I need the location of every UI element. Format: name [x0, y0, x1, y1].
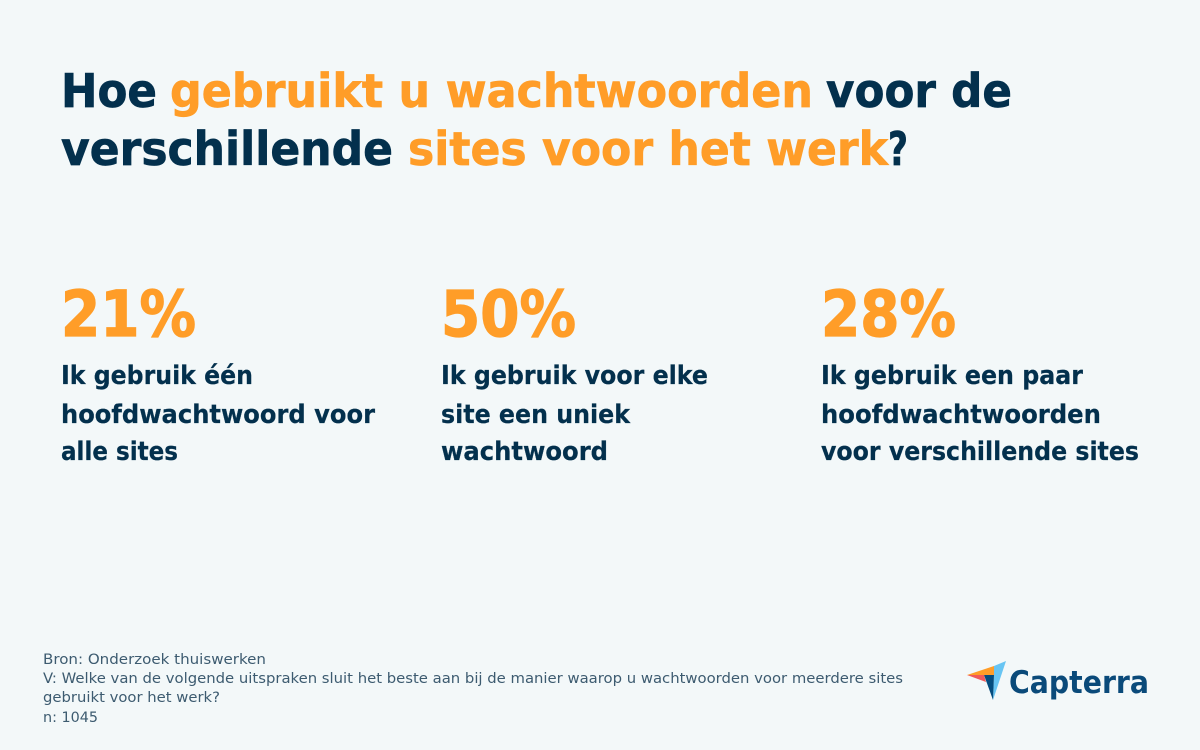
title: [61, 64, 1012, 176]
source note: [43, 652, 903, 726]
source note: Bron: Onderzoek thuiswerken: [43, 652, 266, 668]
stat: 28%: [821, 278, 1139, 467]
title: sites voor het werk: [408, 122, 889, 176]
stat: 28%: voor verschillende sites: [821, 437, 1139, 467]
stat: 50%: 50%: [441, 278, 576, 351]
stat: 21%: 21%: [61, 278, 196, 351]
logo: Capterra: [967, 661, 1149, 701]
title: Hoe: [61, 64, 157, 118]
stat: 50%: [441, 278, 708, 467]
title: voor de: [826, 64, 1012, 118]
title: ?: [888, 122, 908, 176]
stat: 28%: hoofdwachtwoorden: [821, 400, 1101, 430]
stat: 21%: alle sites: [61, 437, 178, 467]
source note: n: 1045: [43, 710, 98, 726]
stat: 28%: 28%: [821, 278, 956, 351]
wordmark: Capterra: [1009, 665, 1149, 701]
icon: Capterra arrow: [967, 661, 1006, 700]
stat: 21%: Ik gebruik één: [61, 361, 253, 391]
stat: 50%: wachtwoord: [441, 437, 608, 467]
stat: 50%: site een uniek: [441, 400, 631, 430]
stat: 50%: Ik gebruik voor elke: [441, 361, 708, 391]
title: gebruikt u wachtwoorden: [170, 64, 813, 118]
source note: V: Welke van de volgende uitspraken sluit het beste aan bij de manier waarop u wachtwoorden voor meerdere sites: [43, 671, 903, 687]
stat: 28%: Ik gebruik een paar: [821, 361, 1083, 391]
stat: 21%: hoofdwachtwoord voor: [61, 400, 375, 430]
title: verschillende: [61, 122, 393, 176]
source note: gebruikt voor het werk?: [43, 690, 220, 706]
stat: 21%: [61, 278, 375, 467]
